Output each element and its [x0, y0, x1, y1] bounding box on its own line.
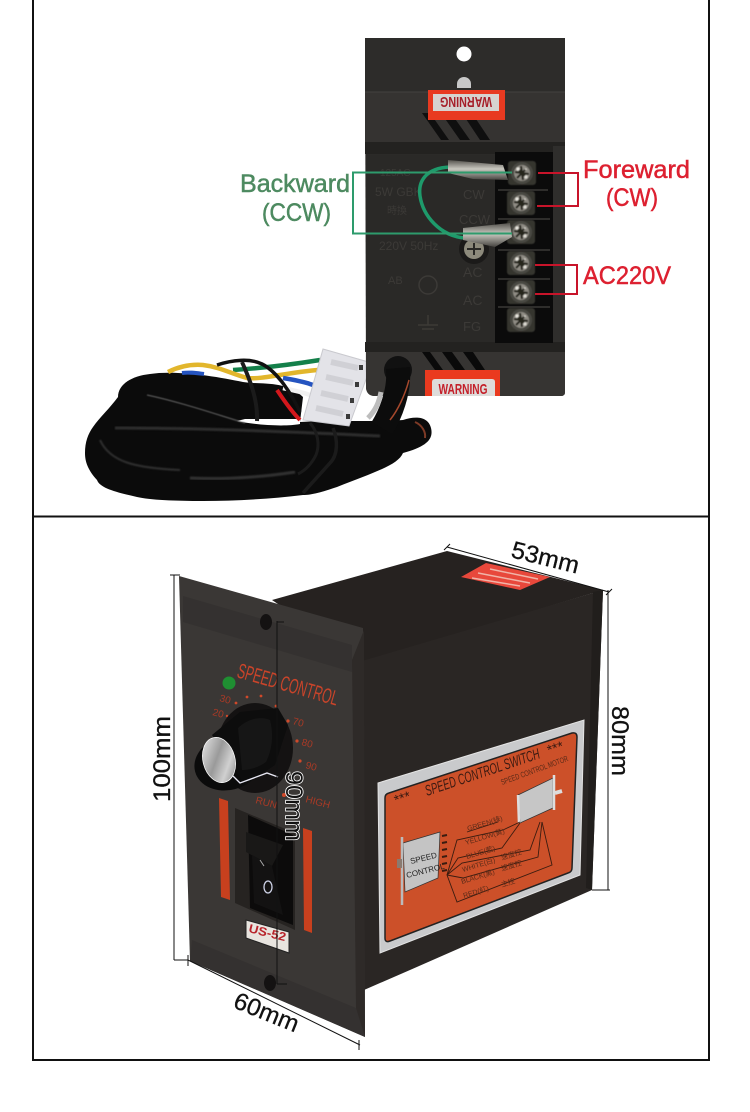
speed control diagram: YELLOW(黃): [464, 826, 506, 847]
callout: AC220V: AC220V: [583, 262, 671, 290]
dimension: 100mm: 100mm: [149, 716, 176, 802]
embossed panel markings: 125AC: [380, 168, 411, 179]
model badge: US-52: [247, 921, 288, 944]
warning label top: [428, 90, 505, 120]
top warning sticker: [461, 563, 550, 590]
speed control text: 90: [304, 760, 318, 774]
embossed panel markings: CW: [463, 187, 485, 202]
callout: backward CCW: [240, 170, 512, 234]
dimension: 60mm: [188, 955, 360, 1050]
model badge: [246, 920, 289, 953]
embossed panel markings: 5W GBK: [375, 185, 422, 199]
dimension: 53mm: 53mm: [509, 537, 582, 580]
warning label bottom: WARNING: [438, 381, 488, 398]
speed control text: SPEED CONTROL: [235, 660, 341, 710]
callout: foreward CW: (CW): [606, 184, 658, 212]
speed control diagram: [397, 775, 562, 905]
panel: dimensions photo: [149, 537, 633, 1050]
embossed panel markings: CCW: [459, 212, 491, 227]
front plate: [179, 576, 365, 1037]
housing: [365, 38, 565, 396]
embossed panel markings: AC: [463, 264, 482, 280]
LED indicator: [222, 676, 236, 690]
embossed panel markings: [375, 168, 491, 334]
rocker switch: [235, 808, 295, 930]
side label: [378, 720, 584, 953]
callout: backward CCW: (CCW): [262, 199, 331, 227]
embossed panel markings: AC: [463, 292, 482, 308]
warning label top: WARNING: [440, 93, 492, 110]
side label: SPEED CONTROL SWITCH: [423, 746, 542, 800]
controller box: [272, 551, 603, 990]
terminal block: [495, 152, 553, 343]
vents top: [422, 113, 490, 140]
dial scale dots: [226, 695, 302, 797]
dimension: 80mm: [592, 590, 633, 890]
orange strips: [219, 798, 312, 933]
speed control text: RUN: [254, 795, 278, 812]
speed knob: [188, 703, 293, 798]
connector plug: [303, 349, 372, 426]
dimension: 80mm: 80mm: [606, 706, 633, 776]
speed control text: [211, 660, 341, 812]
speed control diagram: RED(紅): [462, 884, 490, 900]
side label: ***: [392, 787, 413, 808]
speed control text: HIGH: [304, 794, 331, 811]
cable coil: [85, 373, 432, 501]
panel: wiring photo: [85, 38, 690, 501]
embossed panel markings: 時換: [387, 205, 407, 217]
speed control diagram: 速度控: [500, 847, 523, 862]
dimension: 60mm: 60mm: [230, 988, 303, 1038]
side label: ***: [545, 737, 566, 758]
dimension: 100mm: [149, 575, 188, 960]
side label: SPEED CONTROL MOTOR: [500, 754, 570, 787]
callout: foreward CW: [537, 156, 690, 212]
speed control diagram: 主控: [500, 876, 516, 889]
callout: backward CCW: Backward: [240, 170, 350, 198]
mounting holes: [260, 614, 272, 630]
speed control diagram: SPEED: [409, 851, 438, 866]
speed control diagram: BLACK(黑): [460, 868, 496, 886]
coloured wires: [168, 360, 320, 420]
cable exit from housing: [368, 356, 412, 428]
speed control text: 70: [291, 716, 305, 730]
embossed panel markings: 220V 50Hz: [379, 239, 438, 253]
dimension: 53mm: [444, 537, 612, 595]
dimension: 90mm: [277, 621, 307, 984]
speed control text: 80: [300, 737, 314, 751]
jumper wire with lugs: [420, 160, 512, 247]
speed control diagram: BLUE(藍): [465, 844, 496, 861]
warning label bottom: [425, 370, 500, 398]
speed control diagram: CONTROL: [405, 862, 446, 880]
ground screw: [459, 234, 489, 264]
speed control text: 30: [218, 693, 232, 707]
callout: foreward CW: Foreward: [583, 156, 690, 184]
speed control diagram: 速度控: [500, 858, 523, 873]
callout: AC220V: [535, 262, 671, 294]
cable ties: [242, 362, 336, 493]
speed control diagram: WHITE(白): [461, 855, 496, 874]
vents bottom: [422, 352, 485, 370]
embossed panel markings: FG: [463, 319, 481, 334]
embossed panel markings: AB: [388, 275, 403, 287]
speed control text: 20: [211, 707, 225, 721]
dimension: 90mm: 90mm: [280, 771, 307, 841]
speed control diagram: GREEN(綠): [466, 814, 504, 833]
